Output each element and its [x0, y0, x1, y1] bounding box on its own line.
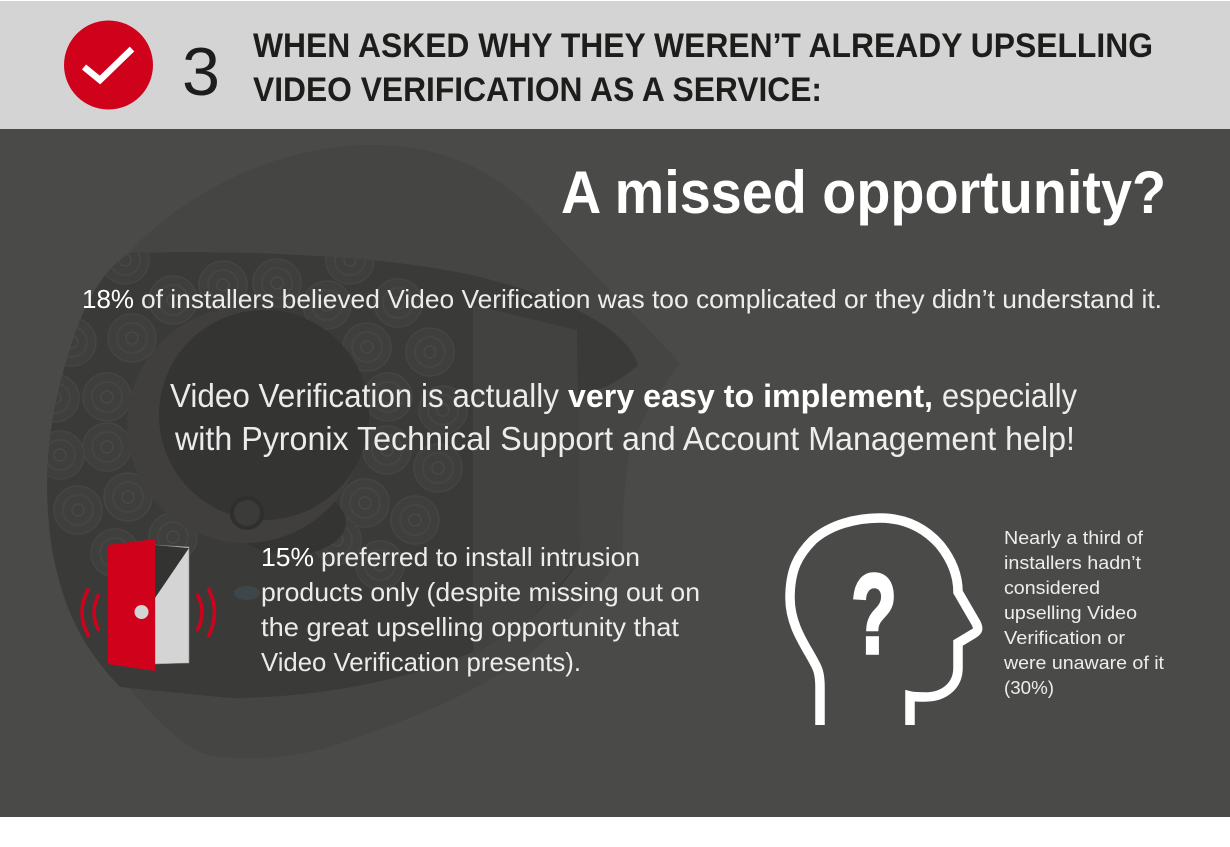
text block: 15% intrusion only: preferred to install intrusion [321, 542, 640, 572]
text block: nearly a third: considered [1004, 578, 1100, 598]
text block: 15% intrusion only: products only (despite missing out on [261, 577, 700, 607]
panel: header band [0, 1, 1230, 129]
text block: nearly a third: (30%) [1004, 678, 1054, 698]
heading: WHEN ASKED WHY THEY WEREN’T ALREADY UPSELLING [253, 27, 1153, 65]
text block: easy to implement: especially [942, 377, 1077, 414]
text block: 18% complicated: 18% [82, 284, 134, 314]
icon: head with question mark [790, 518, 978, 725]
text block: nearly a third: Nearly a third of [1004, 528, 1144, 548]
text block: 15% intrusion only [261, 542, 700, 677]
text block: 18% complicated: of installers believed Video Verification was too complicated or they didn’t understand it. [141, 284, 1162, 314]
text block: 15% intrusion only: 15% [261, 542, 314, 572]
icon: head with question mark: ? [851, 551, 897, 677]
background image: security camera [47, 252, 638, 698]
step number: 3 [182, 34, 220, 110]
heading [253, 27, 1153, 109]
text block: easy to implement [170, 377, 1077, 457]
text block: nearly a third: upselling Video [1004, 603, 1137, 623]
text block: nearly a third: installers hadn’t [1004, 553, 1141, 573]
text block: nearly a third: were unaware of it [1003, 653, 1164, 673]
text block: 15% intrusion only: Video Verification presents). [261, 647, 581, 677]
text block: easy to implement: with Pyronix Technical Support and Account Management help! [174, 420, 1075, 457]
icon: opening door with alarm waves [82, 539, 214, 671]
text block: nearly a third: Verification or [1004, 628, 1125, 648]
icon: red check badge [64, 20, 153, 110]
text block: 15% intrusion only: the great upselling opportunity that [261, 612, 680, 642]
text block: easy to implement: very easy to implement, [568, 378, 933, 414]
text block: easy to implement: Video Verification is actually [170, 377, 559, 414]
heading: VIDEO VERIFICATION AS A SERVICE: [253, 71, 822, 109]
text block: nearly a third [1003, 528, 1164, 698]
title: A missed opportunity? [561, 159, 1166, 226]
